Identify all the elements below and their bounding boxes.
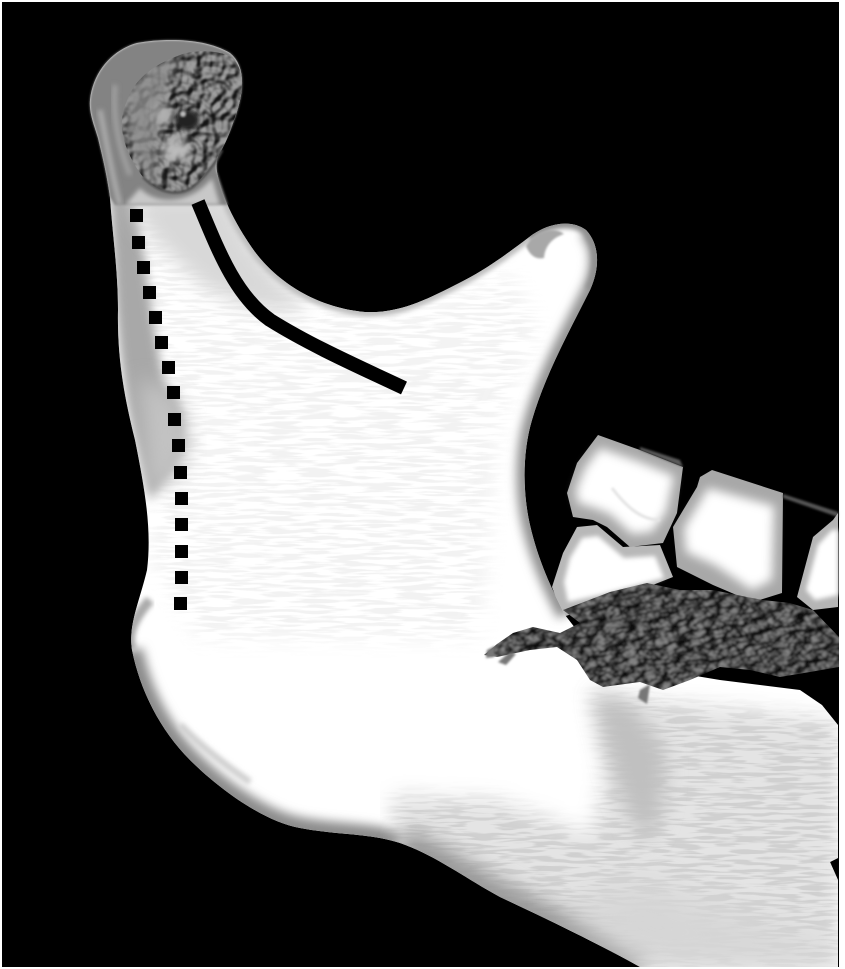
teeth — [552, 435, 838, 617]
condyle collar — [90, 40, 242, 205]
neck light zone — [130, 195, 310, 310]
anterior ramus edge — [525, 230, 597, 615]
coronoid shading — [528, 224, 597, 290]
condyle — [90, 40, 250, 205]
tooth: lower first — [552, 525, 673, 617]
tooth: right — [783, 494, 838, 610]
coronoid tip detail — [526, 230, 564, 258]
tooth: upper first — [567, 435, 683, 547]
dotted black line — [130, 209, 188, 610]
condyle head surface — [122, 51, 242, 192]
tooth: middle — [673, 470, 783, 602]
dark band — [480, 575, 840, 704]
ramus notch edge — [217, 172, 528, 312]
dark fragments — [486, 646, 650, 704]
ramus posterior shading — [95, 120, 183, 500]
textured surface, upper ramus — [146, 242, 532, 636]
angle edge shading — [132, 650, 400, 843]
lower body shading — [380, 680, 840, 969]
solid black line — [198, 202, 404, 388]
